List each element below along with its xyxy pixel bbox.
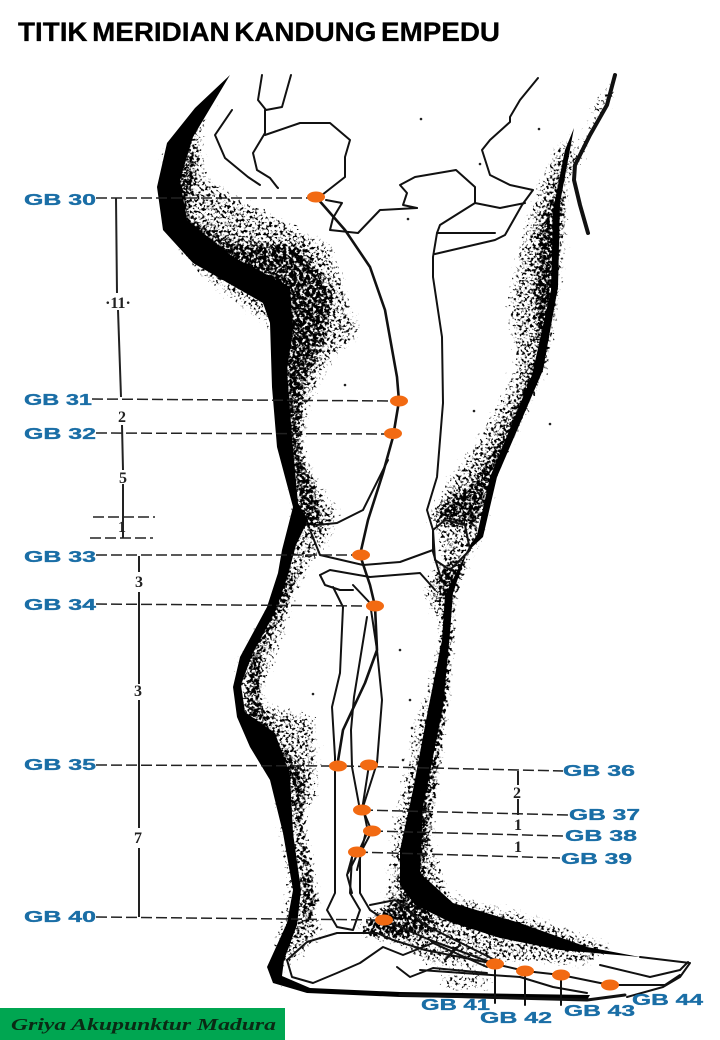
measurement scale left: 3 (135, 574, 143, 591)
meridian line (317, 198, 399, 767)
measurement scale right: 2 (513, 785, 521, 802)
measurement scale left: 2 (118, 409, 126, 426)
point labels: GB 30 (24, 192, 96, 209)
point labels: GB 34 (24, 597, 96, 614)
measurement scale left: 1 (118, 519, 126, 536)
knee and patella (310, 460, 470, 590)
footer badge: Griya Akupunktur Madura (11, 1015, 277, 1034)
point labels: GB 40 (24, 909, 96, 926)
pelvis outline (215, 75, 538, 254)
belly contour (574, 75, 615, 233)
footer badge (0, 1008, 285, 1040)
point labels: GB 38 (565, 828, 637, 845)
point labels: GB 31 (24, 392, 92, 409)
measurement scale left: 7 (134, 830, 142, 847)
acupuncture points (307, 192, 619, 990)
point labels: GB 39 (561, 851, 632, 868)
measurement scale right: 1 (514, 817, 522, 834)
point labels: GB 32 (24, 426, 96, 443)
point labels: GB 43 (564, 1003, 635, 1020)
point labels: GB 37 (569, 807, 640, 824)
scattered specks (312, 118, 551, 761)
point labels: GB 33 (24, 549, 96, 566)
foot bones (287, 900, 690, 1005)
guide lines (90, 198, 568, 920)
dark back-of-leg contour (157, 75, 590, 1000)
point labels: GB 36 (563, 763, 635, 780)
measurement scale left (105, 198, 143, 917)
light stippled shading (160, 73, 620, 992)
measurement scale right (513, 771, 522, 856)
leg illustration (157, 73, 690, 1005)
dark front-of-leg contour (400, 128, 640, 957)
measurement scale left: ·11· (105, 295, 131, 312)
point labels: GB 35 (24, 757, 96, 774)
point labels (24, 192, 703, 1027)
lower leg bones (327, 585, 385, 930)
point labels: GB 41 (421, 997, 490, 1014)
measurement scale left: 3 (134, 683, 142, 700)
point labels: GB 42 (480, 1010, 552, 1027)
measurement scale left: 5 (119, 470, 127, 487)
point labels: GB 44 (632, 992, 703, 1009)
measurement scale right: 1 (514, 839, 522, 856)
femur line (427, 233, 443, 575)
title: TITIK MERIDIAN KANDUNG EMPEDU (18, 17, 500, 47)
dense stippled shading (165, 125, 568, 960)
